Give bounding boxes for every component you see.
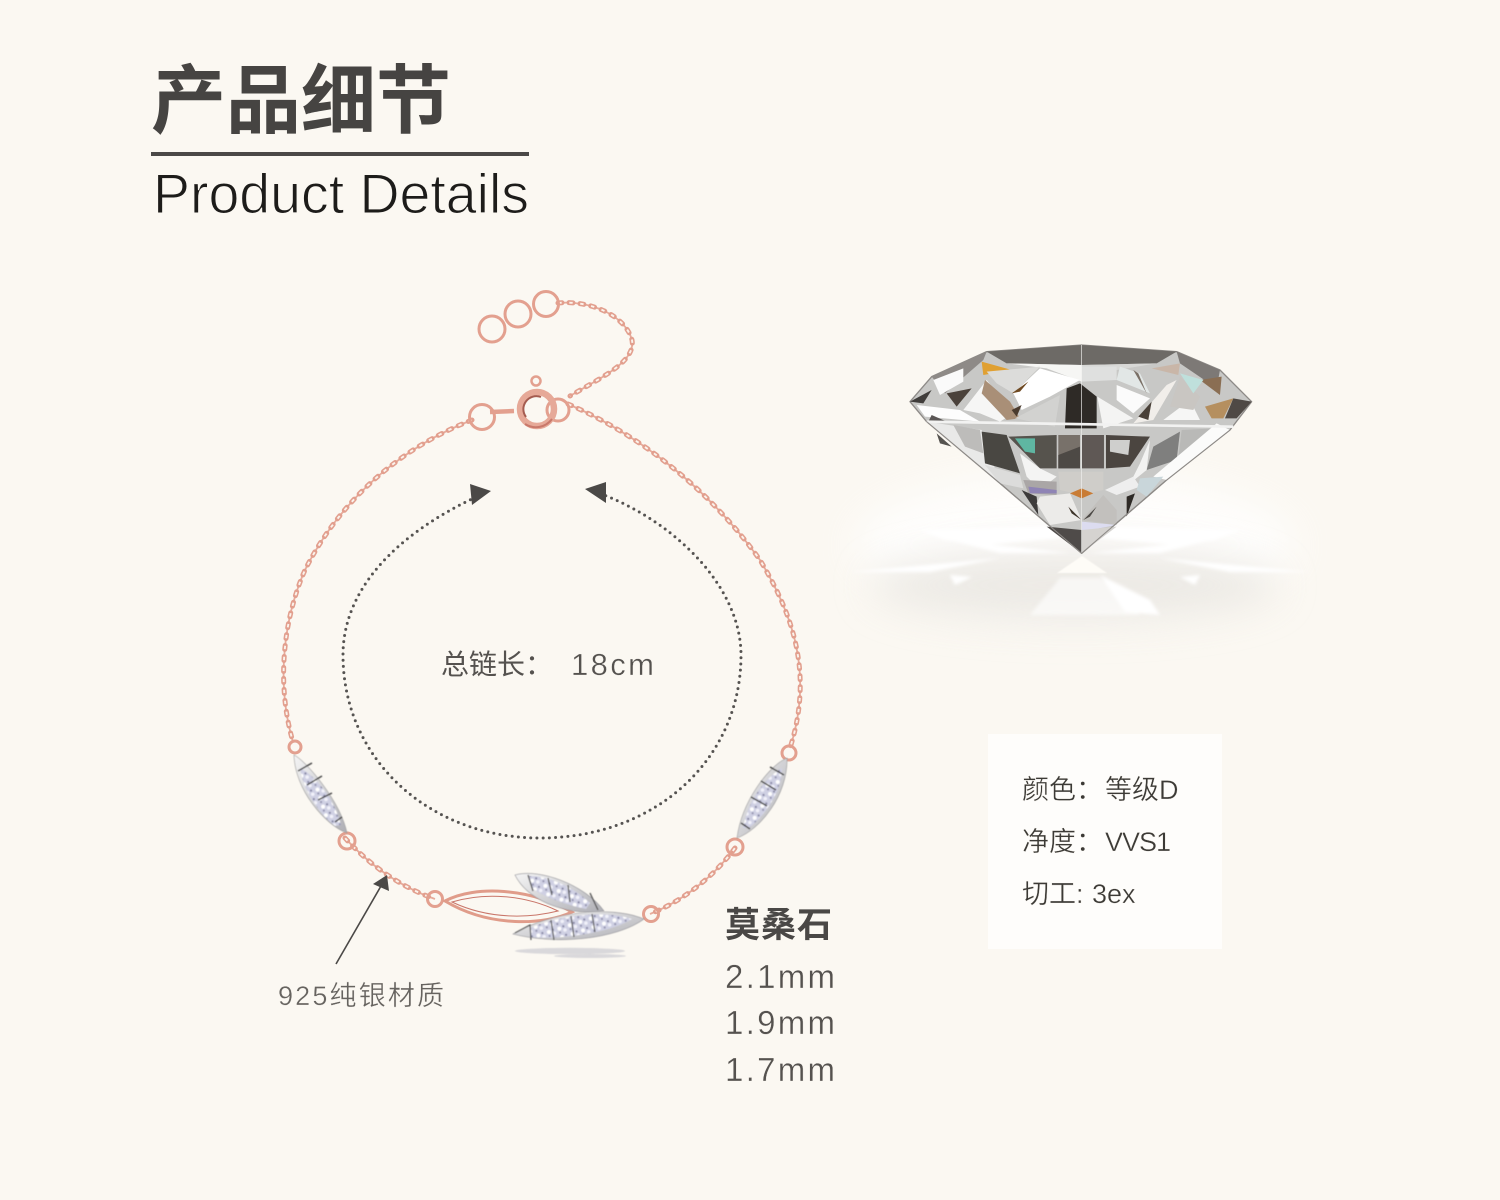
moissanite sizes: 1.9mm bbox=[725, 1004, 835, 1041]
dotted length arrows bbox=[343, 482, 741, 838]
gem leaf upper bbox=[515, 873, 604, 912]
cut: 3ex bbox=[1092, 879, 1136, 909]
spec panel bbox=[988, 734, 1222, 949]
title: Product Details bbox=[153, 162, 529, 225]
title: 产品细节 bbox=[151, 59, 451, 143]
clarity: VVS1 bbox=[1105, 827, 1170, 857]
bracelet bbox=[284, 292, 800, 958]
diamond reflection bbox=[850, 475, 1310, 621]
extender chain bbox=[558, 303, 632, 396]
gem leaf reflection bbox=[515, 948, 626, 958]
clarity: 净度： bbox=[1022, 827, 1103, 857]
diamond bbox=[910, 345, 1252, 553]
label: chain length bbox=[441, 647, 654, 682]
label: material: 925纯银材质 bbox=[278, 981, 444, 1011]
moissanite sizes bbox=[725, 906, 835, 1088]
rose gold marquise bbox=[445, 891, 572, 922]
girdle pavilion band bbox=[927, 422, 1000, 483]
arrow: material bbox=[336, 875, 389, 964]
left gem bar bbox=[294, 755, 347, 833]
gem leaf lower bbox=[513, 912, 644, 940]
colour grade: 颜色： bbox=[1022, 775, 1103, 805]
chain: right arc bbox=[568, 404, 800, 748]
moissanite sizes: 1.7mm bbox=[725, 1051, 835, 1088]
chain: lower left bbox=[345, 838, 435, 899]
chain: left arc bbox=[284, 420, 472, 742]
extender rings bbox=[289, 292, 796, 922]
label: chain length: 总链长： bbox=[441, 649, 553, 680]
right gem bar bbox=[737, 758, 787, 838]
cut: 切工: bbox=[1022, 879, 1084, 909]
diamond silhouette bbox=[910, 345, 1252, 553]
title bbox=[151, 59, 529, 225]
clasp bbox=[520, 376, 554, 427]
diamond facets bbox=[910, 345, 1252, 553]
moissanite sizes: 2.1mm bbox=[725, 958, 835, 995]
colour grade: 等级D bbox=[1105, 775, 1178, 805]
label: chain length: 18cm bbox=[571, 647, 654, 682]
chain: lower right bbox=[650, 848, 735, 914]
moissanite sizes: 莫桑石 bbox=[725, 906, 832, 945]
